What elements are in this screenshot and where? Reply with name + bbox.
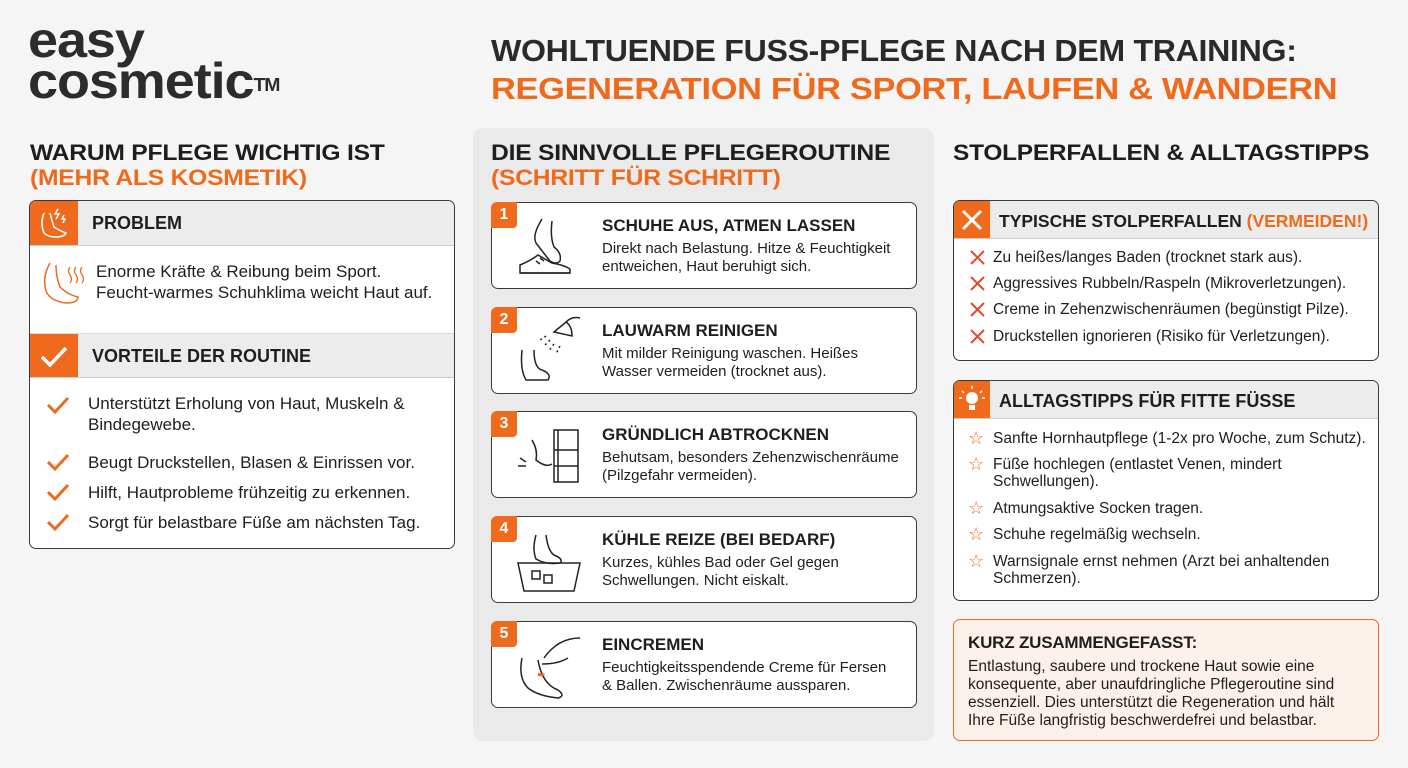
pitfalls list: Zu heißes/langes Baden (trocknet stark aus).	[993, 249, 1302, 266]
problem header	[30, 201, 454, 246]
pitfalls header: TYPISCHE STOLPERFALLEN (VERMEIDEN!)	[999, 211, 1368, 231]
benefits list: Sorgt für belastbare Füße am nächsten Tag.	[88, 513, 420, 532]
step 3: Behutsam, besonders Zehenzwischenräume	[602, 449, 899, 466]
step 5: EINCREMEN	[602, 635, 704, 654]
step 2: Wasser vermeiden (trocknet aus).	[602, 363, 827, 380]
benefits list: Hilft, Hautprobleme frühzeitig zu erkennen.	[88, 483, 410, 502]
summary callout: KURZ ZUSAMMENGEFASST:	[968, 633, 1197, 652]
step 3: (Pilzgefahr vermeiden).	[602, 467, 757, 484]
step 1: Direkt nach Belastung. Hitze & Feuchtigkeit	[602, 240, 890, 257]
tips header: ALLTAGSTIPPS FÜR FITTE FÜSSE	[999, 391, 1295, 411]
routine heading: (SCHRITT FÜR SCHRITT)	[491, 165, 781, 190]
step 4: KÜHLE REIZE (BEI BEDARF)	[602, 530, 835, 549]
problem text: Feucht-warmes Schuhklima weicht Haut auf.	[96, 283, 432, 302]
step 1: 1	[500, 206, 508, 223]
tips list: ☆	[968, 551, 984, 571]
problem text: Enorme Kräfte & Reibung beim Sport.	[96, 262, 381, 281]
step 4	[491, 516, 917, 603]
benefits list	[47, 394, 420, 532]
pitfalls header	[954, 201, 1378, 239]
tips list	[968, 428, 1366, 587]
logo: easy	[28, 12, 144, 68]
benefits list: Beugt Druckstellen, Blasen & Einrissen vor.	[88, 453, 415, 472]
problem text	[44, 262, 432, 304]
tips list: Warnsignale ernst nehmen (Arzt bei anhaltenden	[993, 553, 1329, 570]
tips list: Atmungsaktive Socken tragen.	[993, 500, 1203, 517]
panel: pitfalls	[953, 200, 1379, 361]
benefits list: Unterstützt Erholung von Haut, Muskeln &	[88, 394, 405, 413]
title: REGENERATION FÜR SPORT, LAUFEN & WANDERN	[491, 71, 1337, 106]
step 5	[491, 621, 917, 708]
logo	[28, 12, 280, 109]
right heading: STOLPERFALLEN & ALLTAGSTIPPS	[953, 140, 1369, 165]
title	[491, 33, 1337, 106]
tips list: Schuhe regelmäßig wechseln.	[993, 526, 1201, 543]
step 3: GRÜNDLICH ABTROCKNEN	[602, 425, 829, 444]
tips list: ☆	[968, 498, 984, 518]
benefits list: Bindegewebe.	[88, 415, 196, 434]
tips header	[954, 381, 1378, 419]
step 3: 3	[500, 415, 508, 432]
vorteile header: VORTEILE DER ROUTINE	[92, 346, 311, 366]
summary callout: essenziell. Dies unterstützt die Regeneration und hält	[968, 694, 1334, 711]
tips list: ☆	[968, 428, 984, 448]
summary callout: Entlastung, saubere und trockene Haut sowie eine	[968, 658, 1314, 675]
step 4: Schwellungen. Nicht eiskalt.	[602, 572, 789, 589]
step 5: 5	[500, 625, 508, 642]
tips list: Sanfte Hornhautpflege (1-2x pro Woche, zum Schutz).	[993, 430, 1366, 447]
panel: routine	[473, 128, 934, 741]
step 1	[491, 202, 917, 289]
step 5: Feuchtigkeitsspendende Creme für Fersen	[602, 659, 886, 676]
pitfalls list: Creme in Zehenzwischenräumen (begünstigt Pilze).	[993, 301, 1349, 318]
title: WOHLTUENDE FUSS-PFLEGE NACH DEM TRAINING:	[491, 33, 1297, 68]
pitfalls list	[970, 249, 1349, 345]
panel: left	[29, 200, 455, 549]
routine heading	[491, 140, 890, 190]
step 5: & Ballen. Zwischenräume aussparen.	[602, 677, 850, 694]
left heading	[30, 140, 385, 190]
summary callout: konsequente, aber unaufdringliche Pflegeroutine sind	[968, 676, 1334, 693]
logo: cosmeticTM	[28, 53, 279, 109]
vorteile header	[30, 333, 454, 378]
summary callout	[953, 619, 1379, 741]
tips list: Schwellungen).	[993, 473, 1099, 490]
step 2: 2	[500, 311, 508, 328]
left heading: WARUM PFLEGE WICHTIG IST	[30, 140, 385, 165]
panel: tips	[953, 380, 1379, 601]
step 3	[491, 411, 917, 498]
tips list: ☆	[968, 454, 984, 474]
left heading: (MEHR ALS KOSMETIK)	[30, 165, 307, 190]
routine heading: DIE SINNVOLLE PFLEGEROUTINE	[491, 140, 890, 165]
tips list: Schmerzen).	[993, 570, 1081, 587]
pitfalls list: Aggressives Rubbeln/Raspeln (Mikroverletzungen).	[993, 275, 1346, 292]
step 1: entweichen, Haut beruhigt sich.	[602, 258, 811, 275]
step 2: Mit milder Reinigung waschen. Heißes	[602, 345, 858, 362]
step 1: SCHUHE AUS, ATMEN LASSEN	[602, 216, 855, 235]
step 2: LAUWARM REINIGEN	[602, 321, 778, 340]
problem header: PROBLEM	[92, 213, 182, 233]
summary callout: Ihre Füße langfristig beschwerdefrei und belastbar.	[968, 712, 1317, 729]
step 4: 4	[500, 520, 508, 537]
tips list: ☆	[968, 524, 984, 544]
tips list: Füße hochlegen (entlastet Venen, mindert	[993, 456, 1282, 473]
pitfalls list: Druckstellen ignorieren (Risiko für Verletzungen).	[993, 328, 1330, 345]
step 4: Kurzes, kühles Bad oder Gel gegen	[602, 554, 839, 571]
step 2	[491, 307, 917, 394]
